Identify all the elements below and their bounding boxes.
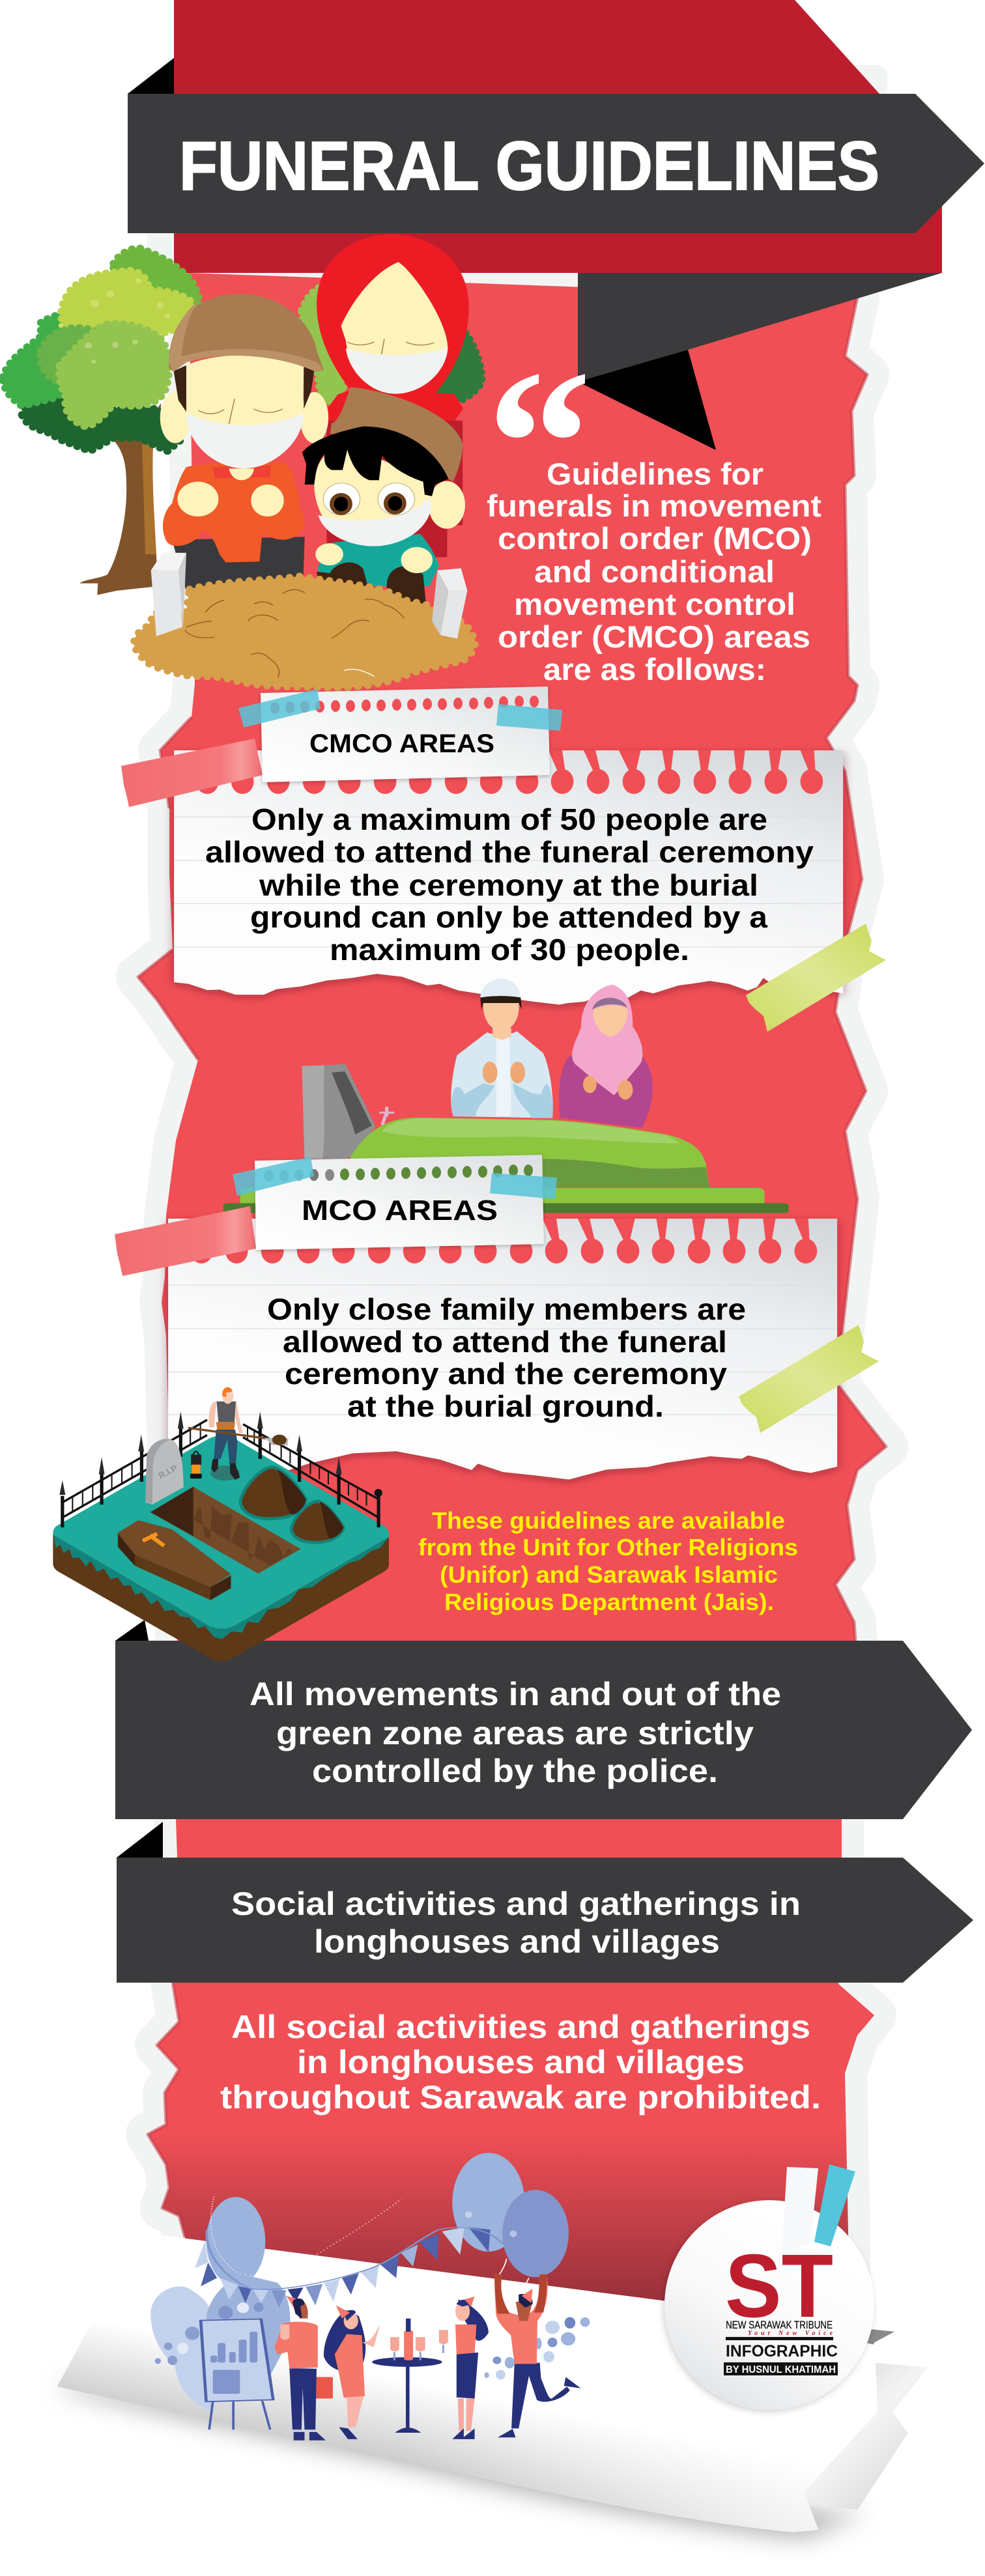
banner: social activities heading: [117, 1858, 973, 1983]
illustration: isometric burial plot: [53, 1387, 389, 1662]
tape: green on MCO note: [739, 1325, 879, 1433]
CMCO body text: [205, 802, 814, 967]
red top ribbon: [174, 0, 942, 273]
CMCO body text: allowed to attend the funeral ceremony: [205, 835, 814, 869]
intro text: control order (MCO): [498, 521, 812, 556]
figure: man holding balloons: [494, 2274, 581, 2437]
title text: FUNERAL GUIDELINES: [179, 128, 879, 205]
dark lower fold of ribbon: [578, 273, 942, 450]
label: CMCO AREAS: CMCO AREAS: [309, 729, 494, 758]
prohibition text: [220, 2009, 821, 2116]
tape: green on CMCO note: [746, 924, 886, 1032]
banner: social activities heading: longhouses and villages: [314, 1923, 720, 1960]
logo infographic word: INFOGRAPHIC: [726, 2342, 838, 2360]
figure: woman with glass: [439, 2297, 489, 2439]
figure: woman in red hijab: [317, 234, 469, 558]
MCO body text: at the burial ground.: [347, 1389, 664, 1423]
logo rule: [726, 2337, 833, 2340]
availability note: Religious Department (Jais).: [444, 1589, 774, 1615]
illustration: family praying at a grave: [3, 234, 482, 688]
tape: pink on CMCO note: [121, 739, 263, 807]
MCO body text: ceremony and the ceremony: [285, 1357, 727, 1391]
bunting: [195, 2228, 504, 2308]
MCO body text: allowed to attend the funeral: [283, 1325, 727, 1359]
figure: man in brown cap: [160, 294, 328, 592]
title banner: [128, 94, 984, 233]
banner: green zone movements: [115, 1641, 972, 1819]
availability note: These guidelines are available: [432, 1507, 785, 1534]
torn white paper at bottom: [57, 2233, 928, 2538]
illustration: party celebration: [150, 2153, 590, 2441]
figure: gravedigger: [188, 1387, 289, 1480]
availability note: (Unifor) and Sarawak Islamic: [440, 1561, 778, 1588]
tape: blue: [238, 689, 562, 731]
CMCO body text: Only a maximum of 50 people are: [251, 802, 767, 836]
dirt piles: [240, 1467, 343, 1542]
intro text: funerals in movement: [487, 488, 821, 523]
panel: CMCO paper note: [174, 750, 843, 1004]
prohibition text: in longhouses and villages: [297, 2044, 745, 2080]
cafe table with bottle and glasses: [372, 2319, 442, 2433]
CMCO body text: ground can only be attended by a: [250, 900, 767, 934]
label: MCO AREAS: MCO AREAS: [302, 1195, 498, 1226]
intro text: order (CMCO) areas: [498, 619, 810, 654]
banner: green zone movements: controlled by the police.: [312, 1753, 718, 1789]
CMCO body text: maximum of 30 people.: [330, 933, 689, 967]
tape: pink on MCO note: [115, 1206, 256, 1276]
balloons: [207, 2153, 569, 2304]
headstone: [145, 1438, 184, 1505]
availability note: from the Unit for Other Religions: [418, 1534, 798, 1561]
logo: New Sarawak Tribune infographic badge: [664, 2164, 874, 2410]
label: MCO AREAS: [233, 1155, 557, 1250]
chart board: [201, 2319, 273, 2429]
prohibition text: throughout Sarawak are prohibited.: [220, 2079, 821, 2116]
tape: blue: [814, 2164, 855, 2246]
label: CMCO AREAS: [238, 686, 562, 782]
prohibition text: All social activities and gatherings: [231, 2009, 810, 2045]
soil base: [53, 1533, 389, 1662]
intro text: are as follows:: [543, 652, 766, 686]
intro text: movement control: [514, 587, 795, 621]
illustration: grave with praying couple: [223, 979, 789, 1213]
logo byline: BY HUSNUL KHATIMAH: [726, 2364, 836, 2375]
logo tagline: Your New Voice: [748, 2330, 833, 2337]
CMCO body text: while the ceremony at the burial: [259, 868, 758, 902]
open grave: [150, 1487, 301, 1574]
logo name: NEW SARAWAK TRIBUNE: [726, 2319, 833, 2331]
black fold behind banner one: [115, 1620, 149, 1641]
tape: white: [782, 2167, 818, 2252]
figure: boy with mask: [302, 387, 465, 606]
headstones: [151, 553, 467, 638]
teal ground: [53, 1436, 389, 1629]
figure: praying man: [451, 979, 553, 1118]
figure: man with glass: [274, 2296, 333, 2441]
black fold behind title ribbon: [128, 58, 174, 94]
black fold behind banner two: [117, 1822, 163, 1858]
MCO body text: Only close family members are: [267, 1292, 746, 1326]
lantern: [190, 1451, 202, 1479]
figure: praying woman: [559, 985, 653, 1128]
availability note: [418, 1507, 798, 1615]
quotation mark: “: [487, 326, 592, 559]
banner: green zone movements: green zone areas are strictly: [276, 1715, 754, 1751]
gravestone: [302, 1064, 375, 1159]
background blobs: [150, 2276, 590, 2412]
banner: social activities heading: Social activities and gatherings in: [231, 1886, 801, 1922]
tape: blue: [233, 1157, 557, 1199]
banner: green zone movements: All movements in and out of the: [250, 1676, 781, 1712]
MCO body text: [267, 1292, 746, 1423]
torn paper background: [138, 65, 887, 2319]
logo ST mark: ST: [725, 2236, 833, 2336]
intro text: Guidelines for: [547, 457, 764, 491]
coffin: [118, 1520, 231, 1600]
intro text: and conditional: [534, 554, 775, 589]
fence: [59, 1411, 382, 1527]
green grave mound: [223, 1118, 789, 1213]
flower: [379, 1107, 394, 1125]
grave mound: [134, 576, 475, 688]
intro text: [487, 457, 821, 686]
panel: MCO paper note: [168, 1219, 837, 1484]
icon: tree: [3, 248, 482, 595]
headstone: R.I.P: [157, 1463, 179, 1480]
figure: woman in orange dress: [324, 2306, 380, 2439]
